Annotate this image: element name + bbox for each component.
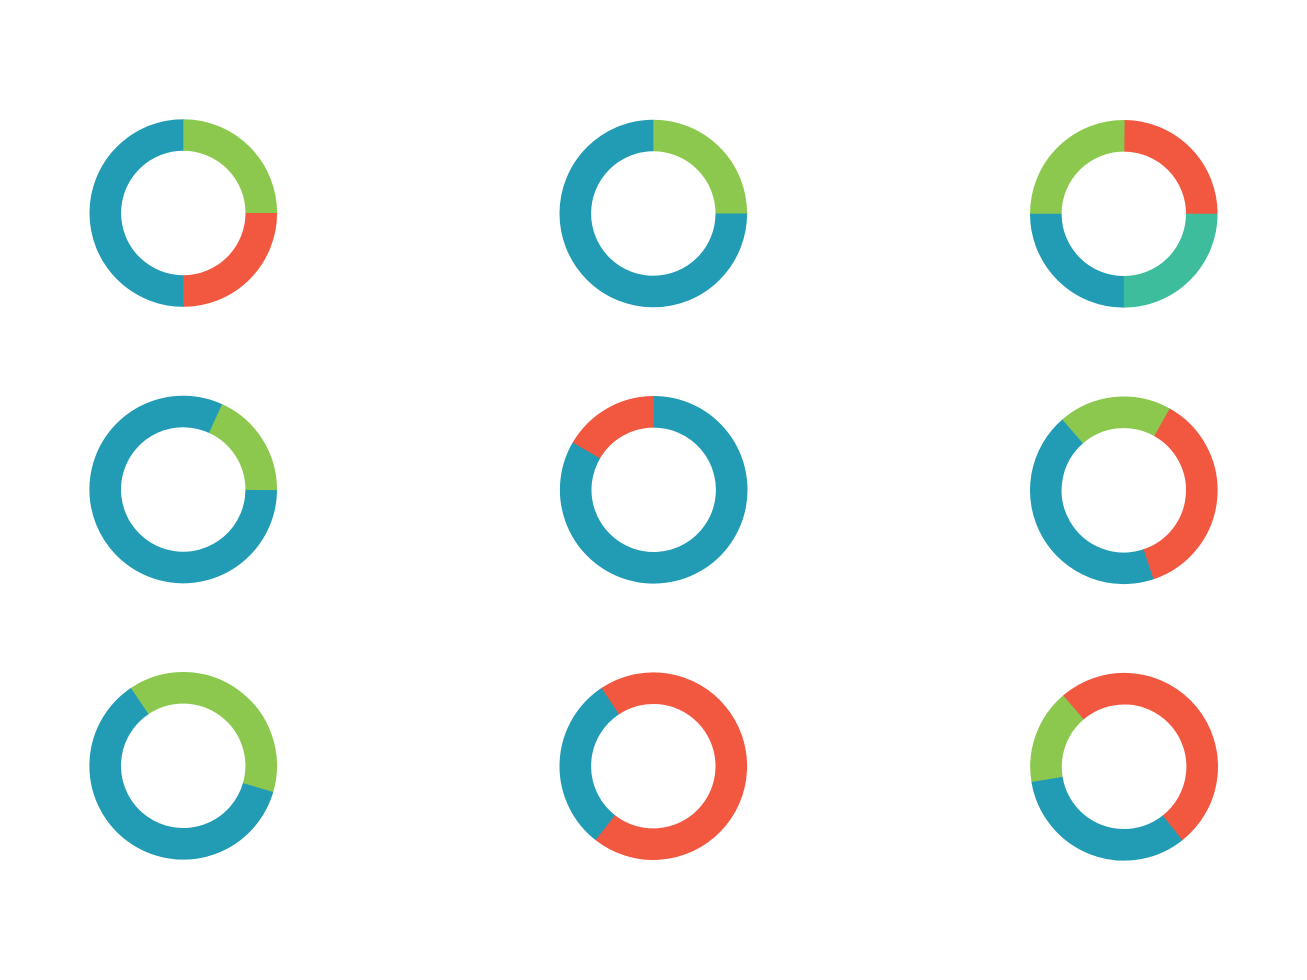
donut 7: green and blue xyxy=(105,688,261,844)
green segment xyxy=(140,688,261,788)
blue segment xyxy=(105,412,261,568)
blue segment xyxy=(1046,431,1149,568)
donut 6: green, red and blue xyxy=(1046,412,1202,568)
green segment xyxy=(183,135,261,214)
red segment xyxy=(1149,422,1202,564)
green segment xyxy=(1046,707,1074,779)
red segment xyxy=(183,213,261,291)
green segment xyxy=(1046,136,1124,214)
donut 3: four equal quarters xyxy=(1046,136,1202,292)
blue segment xyxy=(575,136,731,292)
red segment xyxy=(605,688,731,844)
red segment xyxy=(1124,136,1202,214)
red segment xyxy=(586,412,654,450)
blue segment xyxy=(576,412,732,568)
donut 5: blue and red xyxy=(576,412,732,568)
donut 8: red and blue xyxy=(575,688,731,844)
teal segment xyxy=(1123,214,1202,292)
donut 1: blue, green and red xyxy=(105,135,261,291)
green segment xyxy=(653,136,731,214)
blue segment xyxy=(1047,779,1173,845)
donut 9: red, blue and green xyxy=(1046,689,1202,845)
red segment xyxy=(1073,689,1202,828)
blue segment xyxy=(105,701,258,844)
blue segment xyxy=(1046,213,1124,292)
green segment xyxy=(1073,412,1162,431)
green segment xyxy=(216,419,261,490)
donut 4: blue and green xyxy=(105,412,261,568)
blue segment xyxy=(575,701,611,828)
donut 2: blue and green xyxy=(575,136,731,292)
blue segment xyxy=(105,135,184,291)
